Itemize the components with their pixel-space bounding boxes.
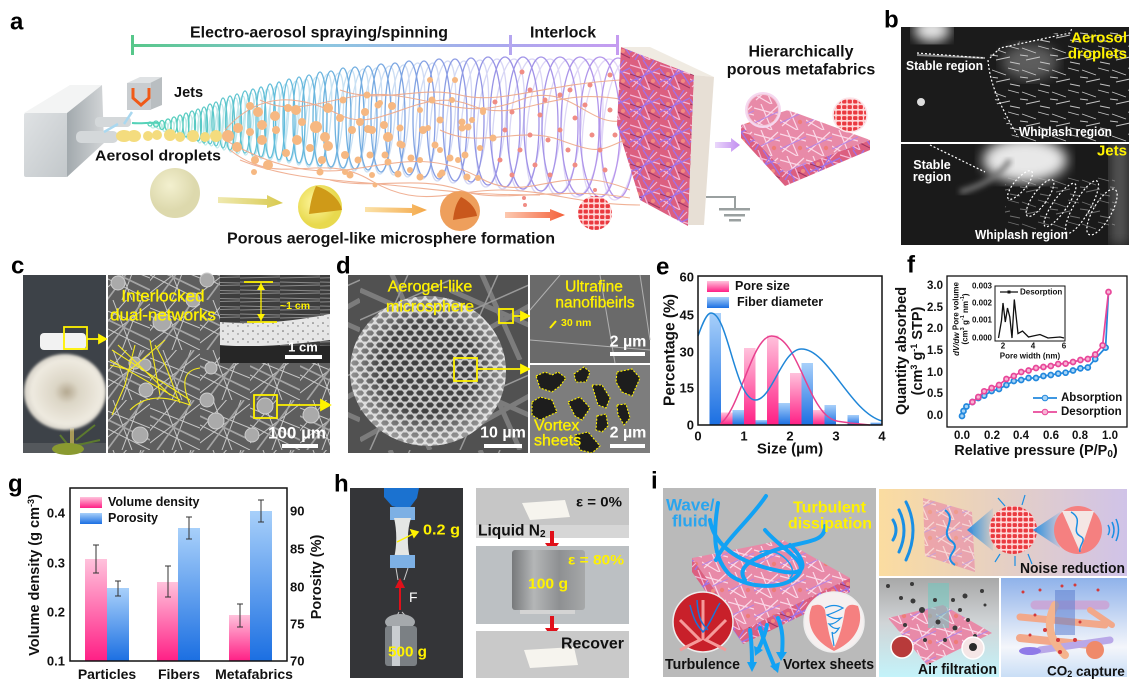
y axis title: 3 (909, 365, 919, 370)
yellow callouts (454, 309, 529, 381)
blue bars (710, 313, 882, 425)
right tick labels: 80 (290, 580, 304, 594)
label b: b (884, 6, 899, 34)
x tick labels (954, 430, 1118, 442)
text: Ultrafine nanofibeirls: nanofibeirls (555, 294, 635, 312)
category labels: Metafabrics (215, 666, 293, 682)
pink microspheres near collector (492, 70, 618, 207)
stream arrow heads (747, 646, 787, 673)
text: Turbulent dissipation: Turbulent (793, 500, 867, 516)
inset pore width chart: 3 (960, 327, 966, 330)
y tick labels: 15 (680, 380, 694, 396)
legend: Desorption (1061, 406, 1122, 418)
x tick labels (694, 428, 886, 444)
y tick labels: 30 (680, 344, 694, 360)
left tick labels: 0.2 (47, 604, 65, 620)
y axis title: -1 (909, 344, 919, 352)
text: Interlocked dual-networks: Interlocked (121, 286, 205, 306)
shelled sphere (298, 185, 342, 229)
scale 2 µm top: 2 µm (610, 334, 646, 350)
x axis title: 0 (1107, 448, 1113, 460)
y tick labels (927, 280, 944, 422)
inset pore width chart: nm (960, 301, 970, 315)
inset pore width chart: -1 (960, 315, 966, 320)
text: Liquid N2: Liquid N (478, 522, 540, 540)
process timeline bar (131, 35, 619, 55)
text: Whiplash region: Whiplash region (1019, 125, 1112, 139)
spinning jet coils (145, 57, 645, 200)
caption: microsphere formation: Porous aerogel-like microsphere formation (227, 230, 555, 248)
inset pore width chart: 0.002 (972, 298, 993, 308)
inset pore width chart: g (960, 320, 970, 327)
arrow 2 (365, 204, 427, 216)
label c: c (11, 252, 24, 280)
y axis titles: ) (27, 494, 43, 499)
y tick labels: 60 (680, 270, 694, 284)
right tick labels: 75 (290, 616, 304, 632)
jets image (901, 138, 1129, 245)
legend: Pore size (735, 279, 790, 293)
scale 1 cm (285, 340, 322, 359)
text: Aerosol droplets (1068, 30, 1127, 62)
nozzles (76, 112, 132, 143)
jet thin stream (132, 122, 160, 124)
legend: Porosity (108, 511, 158, 525)
text: CO2 capture: CO (1047, 664, 1067, 678)
spray device box (24, 85, 104, 177)
text: Vortex sheets (534, 418, 581, 450)
x tick labels: 0.0 (954, 430, 970, 442)
y tick labels: 2.0 (927, 323, 943, 335)
label a: a (10, 8, 24, 36)
aerosol fibre waves (225, 80, 640, 205)
text: Air filtration: Air filtration (918, 662, 997, 678)
text: Whiplash region lower: Whiplash region (975, 228, 1068, 242)
label i: i (651, 468, 658, 494)
y axis title: Quantity absorbed (894, 287, 910, 415)
vortex circle (804, 592, 864, 652)
absorption curve (960, 292, 1108, 418)
text: CO2 capture: 2 (1067, 669, 1072, 679)
magnified red microsphere (833, 98, 867, 132)
text: Recover: Recover (561, 636, 624, 652)
turbulent dissipation panel (663, 488, 876, 677)
text: ε = 80%: ε = 80% (568, 552, 624, 568)
inset pore width chart (952, 282, 1067, 360)
right tick labels: 70 (290, 654, 304, 668)
label d: d (336, 252, 351, 280)
aerosol droplets image (901, 18, 1129, 142)
jet inset cube icon (127, 77, 162, 110)
desorption curve (970, 290, 1111, 404)
category labels: Particles (78, 666, 136, 682)
inset pore width chart: dV/dw Pore volume (952, 282, 960, 356)
y tick labels: 0.0 (927, 410, 943, 422)
y axis title (894, 287, 926, 415)
droplet sphere (150, 168, 200, 218)
left tick labels: 0.3 (47, 556, 65, 570)
panel c: dandelion and SEM (11, 252, 330, 455)
right tick labels: 90 (290, 504, 304, 518)
magnified fibre circle (746, 93, 780, 127)
inset pore width chart: 0.001 (972, 316, 993, 324)
text: CO2 capture: capture (1072, 664, 1125, 678)
text: ε = 0%: ε = 0% (576, 494, 622, 510)
text: Aerosol droplets: Aerosol (1071, 30, 1127, 46)
bars (85, 511, 272, 661)
inset pore width chart: 0.003 (972, 282, 993, 290)
nanofibrils SEM (530, 275, 650, 363)
turbulence circle (673, 592, 733, 652)
heading: Hierarchically porous metafabrics: Hierarchically (749, 44, 854, 60)
text: 100 g: 100 g (528, 576, 568, 592)
porous orange sphere (440, 191, 480, 231)
text: Turbulence: Turbulence (665, 657, 740, 673)
left tick labels (47, 506, 66, 668)
legend (707, 279, 823, 309)
y tick labels (680, 270, 694, 432)
inset pore width chart: (cm (960, 330, 970, 345)
text: Vortex sheets: Vortex sheets (783, 657, 874, 673)
SEM fibre network (108, 275, 330, 453)
x tick labels: 0.6 (1043, 430, 1059, 442)
y axis title: g (910, 352, 926, 365)
scale 100 µm: 100 µm (268, 424, 326, 442)
text: Interlocked dual-networks (110, 286, 216, 324)
fit curves (698, 313, 882, 425)
inset pore width chart: 6 (1062, 342, 1067, 350)
legend (1033, 392, 1122, 418)
left tick labels: 0.1 (47, 654, 65, 668)
heading: Hierarchically porous metafabrics (727, 44, 875, 78)
panel g: density and porosity bars (8, 470, 325, 682)
legend: Volume density (108, 495, 200, 509)
category labels: Fibers (158, 666, 200, 682)
yellow fibre tracing (110, 340, 200, 415)
y tick labels: 3.0 (927, 280, 943, 292)
panel b: high-speed images (884, 6, 1129, 245)
arrow 1 (218, 195, 283, 208)
panel a: electro-aerosol spinning schematic (10, 8, 875, 248)
tensile test photo (350, 488, 463, 678)
text: Wave/fluid: fluid (672, 512, 708, 530)
photo: uncompressed sample (476, 488, 629, 538)
text: Interlocked dual-networks: dual-networks (110, 306, 216, 324)
text: Wave/fluid: Wave/ (666, 496, 715, 514)
y axis titles: Porosity (%) (309, 535, 325, 619)
inset cross-section (220, 275, 330, 363)
y tick labels: 0 (687, 418, 694, 432)
text: Ultrafine nanofibeirls (555, 278, 635, 312)
right tick labels (290, 504, 304, 668)
heading: Hierarchically porous metafabrics: porous metafabrics (727, 62, 875, 78)
panel h: mechanical demonstration (334, 470, 629, 678)
SEM main with microsphere (348, 275, 528, 453)
text: Stable region: Stable region (906, 59, 983, 73)
axes frame (947, 276, 1127, 427)
noise reduction panel (879, 489, 1127, 576)
red aerogel microsphere (578, 196, 612, 230)
y axis title: STP) (910, 306, 926, 344)
yellow selection and arrow (64, 327, 106, 349)
label f: f (907, 252, 916, 278)
text: Turbulent dissipation (788, 500, 872, 532)
y tick labels: 0.5 (927, 388, 944, 400)
text: Stable region lower: region (913, 170, 951, 184)
text: Noise reduction: Noise reduction (1020, 561, 1125, 577)
y axis titles (26, 494, 325, 656)
y axis titles: Volume density (g cm (27, 507, 43, 656)
panel e: size distribution chart (656, 254, 886, 458)
x axis title: ) (1113, 443, 1118, 459)
y axis title: (cm (910, 370, 926, 395)
arrow 3 (505, 209, 565, 221)
grounded collector plate (621, 47, 750, 225)
text: Turbulent dissipation: dissipation (788, 516, 872, 532)
x tick labels: 0 (694, 428, 702, 444)
text: Aerogel-like microsphere: Aerogel-like (388, 278, 472, 296)
label: Aerosol droplets: Aerosol droplets (95, 148, 221, 164)
label e: e (656, 254, 669, 280)
y axis title: Percentage (%) (662, 294, 678, 406)
x axis title: Size (µm) (757, 440, 823, 458)
text: 500 g: 500 g (388, 644, 427, 660)
x tick labels: 1.0 (1102, 430, 1118, 442)
label: Jets: Jets (174, 85, 203, 101)
x tick labels: 4 (878, 428, 886, 444)
left tick labels: 0.4 (47, 506, 66, 520)
inset pore width chart: Pore width (nm) (1000, 352, 1061, 360)
x tick labels: 0.4 (1013, 430, 1030, 442)
text: Aerogel-like microsphere: microsphere (386, 298, 474, 316)
yellow arrow (397, 530, 418, 542)
category labels (78, 666, 293, 682)
text: Vortex sheets: Vortex (534, 418, 579, 434)
inset pore width chart: -1 (960, 296, 966, 301)
air filtration panel (879, 578, 999, 677)
text: Aerosol droplets: droplets (1068, 46, 1127, 62)
panel i: applications (651, 468, 1127, 679)
aerosol droplet chain (116, 129, 222, 142)
error bars (93, 500, 264, 627)
panel d: microsphere SEM (336, 252, 650, 453)
yellow box and arrow to d (254, 395, 330, 418)
inset pore width chart: 4 (1031, 342, 1036, 350)
orange aerosol microspheres (222, 77, 496, 188)
text: Stable region lower (913, 158, 951, 184)
panel f: adsorption isotherm (894, 252, 1127, 460)
text: Ultrafine nanofibeirls: Ultrafine (565, 278, 623, 296)
x tick labels: 3 (832, 428, 840, 444)
scale 1 cm: 1 cm (288, 340, 318, 354)
dandelion photo (23, 275, 106, 455)
blue wave-fluid streams (710, 496, 825, 668)
CO2 capture panel (1001, 578, 1127, 677)
inset pore width chart: ) (960, 293, 970, 296)
arrow to metafabric (715, 138, 740, 152)
vortex sheets SEM (530, 365, 650, 453)
y tick labels: 1.0 (927, 367, 943, 379)
inset pore width chart: Desorption (1020, 288, 1062, 296)
text: F: F (409, 589, 418, 605)
label g: g (8, 470, 23, 498)
pink bars (721, 336, 824, 425)
text: ~1 cm: ~1 cm (280, 300, 310, 312)
x tick labels: 2 (786, 428, 794, 444)
axes frame (70, 488, 287, 661)
y tick labels: 1.5 (927, 345, 944, 357)
y tick labels: 45 (680, 308, 694, 322)
photo: compressed by weight (476, 546, 629, 624)
text: Aerogel-like microsphere (386, 278, 474, 316)
heading: Electro-aerosol spraying/spinning: Electro-aerosol spraying/spinning (190, 24, 448, 42)
inset pore width chart: 2 (1001, 342, 1006, 350)
red force arrow (395, 578, 405, 610)
text: Jets: Jets (1097, 142, 1127, 160)
label h: h (334, 470, 349, 498)
x tick labels: 1 (740, 428, 748, 444)
arrow down 1 (545, 531, 559, 553)
text: Vortex sheets: sheets (534, 432, 581, 450)
metafabric block (741, 110, 870, 186)
legend: Fiber diameter (737, 295, 823, 309)
scale 10 µm: 10 µm (480, 424, 526, 442)
heading: Interlock: Interlock (530, 24, 596, 42)
legend (80, 495, 200, 525)
text: Stable region lower: Stable (913, 158, 951, 172)
metafabric forming on collector (617, 47, 694, 226)
x tick labels: 0.2 (984, 430, 1000, 442)
x tick labels: 0.8 (1072, 430, 1089, 442)
text: 30 nm: 30 nm (561, 317, 591, 329)
y axis titles: -3 (26, 499, 36, 507)
x axis title: Relative pressure (P/P (954, 443, 1107, 459)
SEM microspheres (111, 273, 319, 443)
text: 0.2 g: 0.2 g (423, 522, 460, 538)
text: Wave/fluid (666, 496, 715, 530)
inset pore width chart: 0.000 (972, 334, 993, 342)
right tick labels: 85 (290, 542, 304, 556)
scale 2 µm bottom: 2 µm (610, 424, 646, 442)
text: Liquid N2: 2 (540, 528, 546, 540)
legend: Absorption (1061, 392, 1122, 404)
axes frame (698, 276, 882, 425)
photo: recovered sample (476, 631, 629, 678)
arrow down 2 (545, 616, 559, 638)
y tick labels: 2.5 (927, 302, 944, 314)
